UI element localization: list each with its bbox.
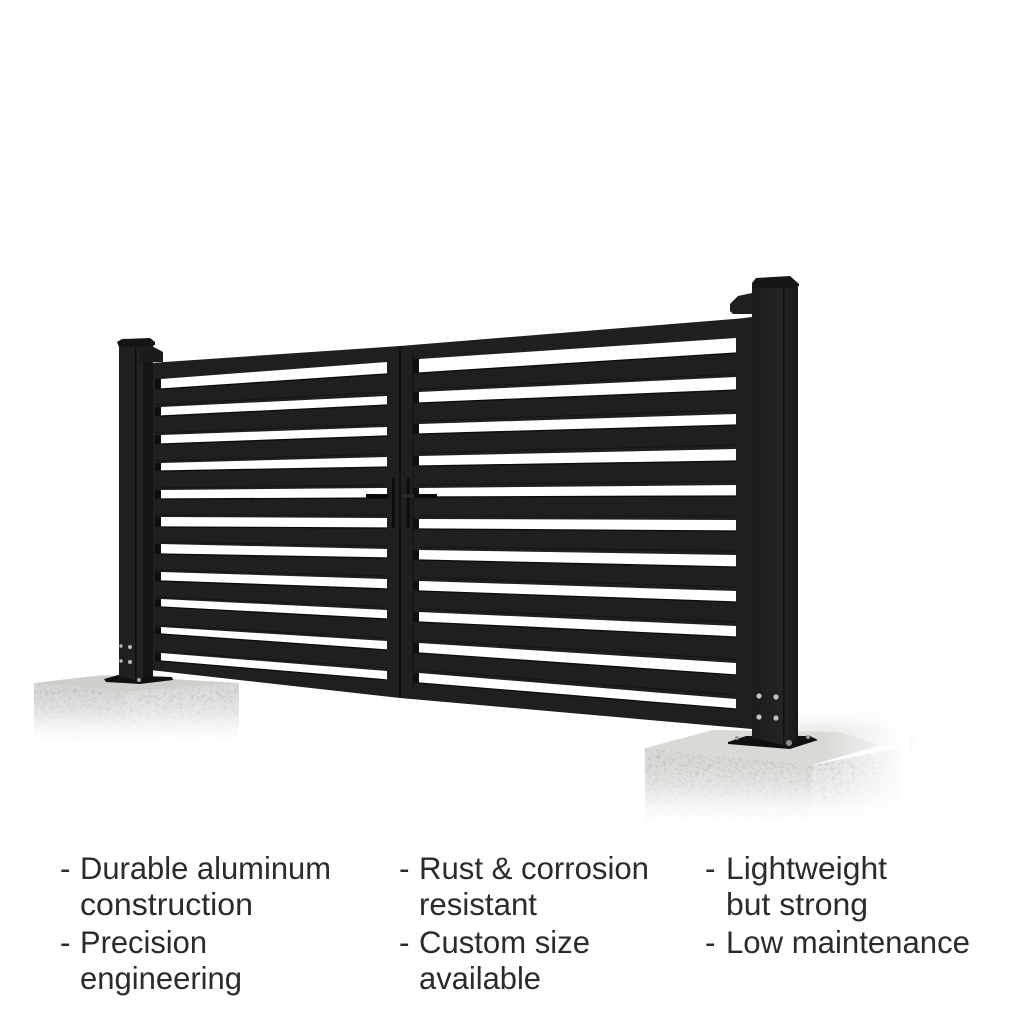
- left post cap: [117, 338, 155, 347]
- right concrete footing: [645, 720, 896, 811]
- feature list column 1: -: [60, 924, 70, 960]
- left leaf slat openings: [161, 362, 387, 680]
- feature list column 3: -: [705, 924, 716, 960]
- left post bolts: [119, 644, 132, 664]
- feature list column 2: available: [419, 960, 541, 996]
- feature list column 1: Precision: [80, 924, 207, 960]
- feature list column 2: -: [399, 850, 410, 886]
- feature list column 2: Custom size: [419, 924, 590, 960]
- right plate front bolt: [786, 740, 792, 746]
- slat shadow lines: [161, 353, 736, 709]
- right post: [728, 276, 818, 749]
- feature list column 2: Rust & corrosion: [419, 850, 649, 886]
- right post body: [752, 287, 798, 745]
- left plate bolt: [137, 678, 141, 682]
- feature list column 1: engineering: [80, 960, 242, 996]
- leaf meeting stile: [399, 346, 401, 698]
- right leaf slat openings: [419, 338, 736, 709]
- right post cap: [752, 276, 799, 288]
- left post body: [119, 345, 153, 680]
- left base plate: [104, 675, 173, 684]
- right plate rear bolts: [735, 735, 810, 740]
- right hinge: [730, 293, 752, 314]
- slat lower-edge lines: [155, 374, 736, 695]
- feature list column 1: -: [60, 850, 70, 886]
- slat end shadows: [155, 359, 419, 683]
- right post bolts: [756, 693, 779, 721]
- feature list column 3: Low maintenance: [726, 924, 970, 960]
- gate: double leaf with horizontal slats: [150, 317, 752, 729]
- centre handles: [366, 478, 437, 528]
- feature list column 2: -: [399, 924, 410, 960]
- gate frame: [150, 317, 752, 729]
- feature list column 2: [399, 850, 649, 996]
- feature list column 3: -: [705, 850, 716, 886]
- feature list column 1: [60, 850, 331, 996]
- left concrete footing: [34, 675, 239, 732]
- feature list column 3: Lightweight: [726, 850, 887, 886]
- feature list column 1: Durable aluminum: [80, 850, 331, 886]
- right base plate: [728, 736, 818, 749]
- feature list column 3: [705, 850, 970, 960]
- feature list column 2: resistant: [419, 886, 537, 922]
- feature list column 3: but strong: [726, 886, 868, 922]
- feature list column 1: construction: [80, 886, 253, 922]
- left hinge: [138, 345, 163, 362]
- left post: [104, 338, 173, 684]
